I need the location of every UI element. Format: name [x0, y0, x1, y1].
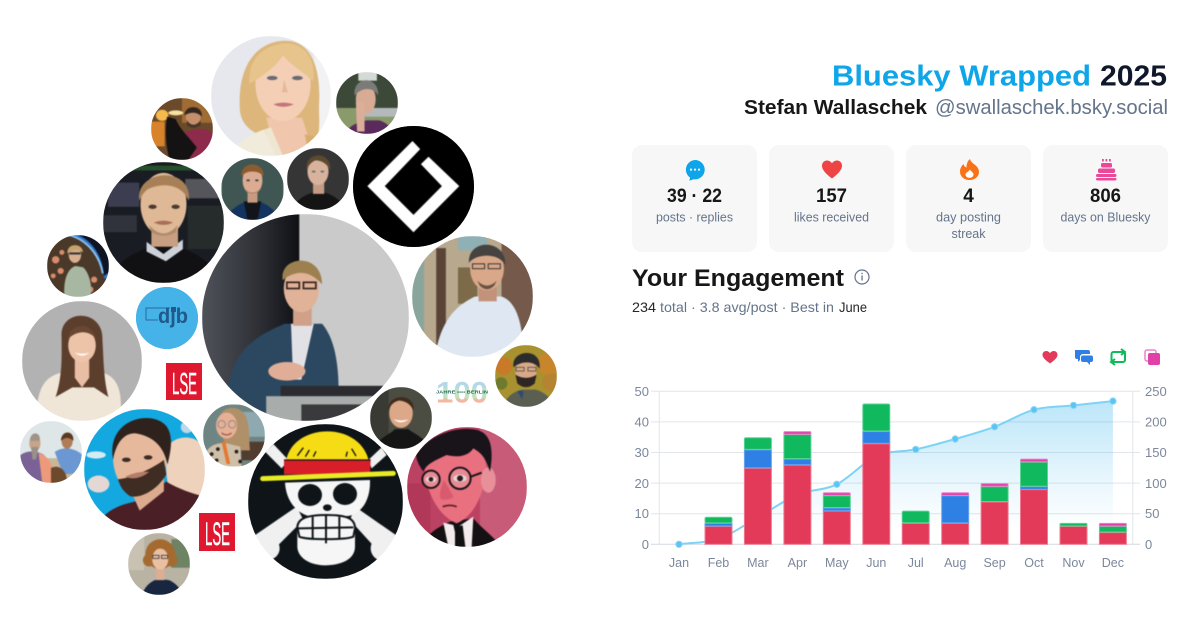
avatar: black logo with white open diamond — [353, 126, 474, 247]
icon: legend likes — [1042, 351, 1058, 364]
avatar: man in blue suit on green background — [221, 158, 284, 220]
avatar: man with hand over face — [336, 72, 398, 134]
left axis labels: 10 — [635, 506, 649, 521]
month labels: Feb — [708, 556, 729, 570]
chart: monthly engagement stacked bars with cumulative line — [635, 384, 1167, 570]
panel: days on Bluesky: 806 — [1090, 186, 1121, 207]
avatar: smiling woman with glasses in a hall — [203, 404, 265, 467]
bars: August — [942, 493, 969, 544]
month labels: Oct — [1024, 556, 1044, 570]
user name and handle: @swallaschek.bsky.social — [935, 97, 1168, 119]
user name and handle: Stefan Wallaschek — [744, 97, 928, 119]
right axis labels: 150 — [1145, 445, 1167, 460]
panel: day posting streak: streak — [952, 226, 986, 241]
right axis labels: 50 — [1145, 506, 1159, 521]
left axis labels: 0 — [642, 537, 649, 552]
panel: posts and replies: posts · replies — [656, 210, 733, 224]
engagement summary: total · 3.8 avg/post · Best in — [660, 299, 834, 315]
icon: legend reposts — [1111, 349, 1125, 365]
right axis labels: 100 — [1145, 476, 1167, 491]
title: Bluesky Wrapped — [832, 60, 1091, 92]
icon: chat bubble — [686, 160, 705, 180]
month labels: Dec — [1102, 556, 1124, 570]
panel: day posting streak: day posting — [936, 210, 1001, 224]
avatar: djb logo: djb — [158, 305, 188, 328]
cumulative line — [679, 401, 1113, 544]
left axis labels — [635, 384, 649, 552]
month labels: Sep — [983, 556, 1006, 570]
left axis labels: 30 — [635, 445, 649, 460]
panel: day posting streak: 4 — [963, 186, 974, 207]
title: 2025 — [1100, 60, 1167, 92]
month labels: May — [825, 556, 849, 570]
avatar: caricature of man with round glasses — [407, 427, 527, 547]
icon: legend replies — [1075, 350, 1093, 365]
avatar: woman with long brown hair — [22, 301, 142, 421]
panel: likes received — [769, 145, 894, 252]
left axis labels: 20 — [635, 476, 649, 491]
right axis labels: 200 — [1145, 414, 1167, 430]
icon: flame — [960, 159, 979, 180]
avatar: bearded man with autumn leaves — [495, 345, 557, 407]
user name and handle — [744, 97, 1168, 119]
avatar: young man with dark background — [103, 162, 224, 283]
month labels: Mar — [747, 556, 769, 570]
bars: March — [744, 438, 771, 544]
panel: days on Bluesky: days on Bluesky — [1060, 210, 1151, 224]
avatar: blonde woman — [211, 36, 331, 156]
avatar: Plato and Aristotle painting — [20, 421, 82, 483]
avatar: woman with curly red hair — [128, 533, 190, 595]
bars: February — [705, 517, 732, 544]
left axis labels: 40 — [635, 414, 649, 430]
right axis labels — [1145, 384, 1167, 552]
right axis labels: 250 — [1145, 384, 1167, 399]
icon: heart — [822, 160, 842, 178]
month labels: Nov — [1062, 556, 1085, 570]
bars: September — [981, 484, 1008, 544]
avatar: straw hat pirate flag — [248, 424, 403, 579]
bars: May — [823, 493, 850, 544]
panel: days on Bluesky — [1043, 145, 1168, 252]
bars: November — [1060, 523, 1087, 544]
panel: day posting streak — [906, 145, 1031, 252]
heading: Your Engagement: Your Engagement — [632, 265, 844, 292]
avatar: djb logo — [136, 287, 198, 349]
logo: 100 Jahre Berlin: JAHRE ▪▪▪▪ BERLIN — [436, 390, 488, 394]
month labels: Jul — [908, 556, 924, 570]
icon: info — [855, 270, 869, 284]
month labels — [669, 556, 1124, 570]
month labels: Jun — [866, 556, 886, 570]
cumulative area — [679, 401, 1113, 544]
avatar: man with black cat — [151, 98, 213, 160]
chart legend — [1042, 349, 1160, 365]
avatar: woman with globe and sparks — [47, 235, 109, 297]
left axis labels: 50 — [635, 384, 649, 399]
bars: December — [1099, 523, 1126, 544]
cumulative points — [676, 398, 1116, 548]
avatar: man in white shirt in a street — [412, 236, 533, 357]
engagement summary: June — [839, 299, 867, 315]
month labels: Apr — [788, 556, 807, 570]
month labels: Aug — [944, 556, 966, 570]
avatar: main profile picture, man at podium — [202, 214, 409, 421]
engagement summary: 234 — [632, 299, 656, 315]
icon: legend quotes — [1145, 350, 1160, 365]
bars: June — [863, 404, 890, 544]
panel: posts and replies — [632, 145, 757, 252]
icon: cake — [1096, 159, 1116, 180]
avatar: man in black turtleneck — [370, 387, 432, 449]
avatar: man in black t-shirt — [287, 148, 349, 210]
panel: likes received: likes received — [794, 210, 869, 224]
right axis labels: 0 — [1145, 537, 1152, 552]
bars: July — [902, 511, 929, 544]
panel: posts and replies: 39 · 22 — [667, 186, 722, 207]
bars: April — [784, 432, 811, 544]
month labels: Jan — [669, 556, 689, 570]
bars: October — [1020, 459, 1048, 544]
avatar: bearded man on blue sky — [84, 409, 205, 530]
panel: likes received: 157 — [816, 186, 847, 207]
